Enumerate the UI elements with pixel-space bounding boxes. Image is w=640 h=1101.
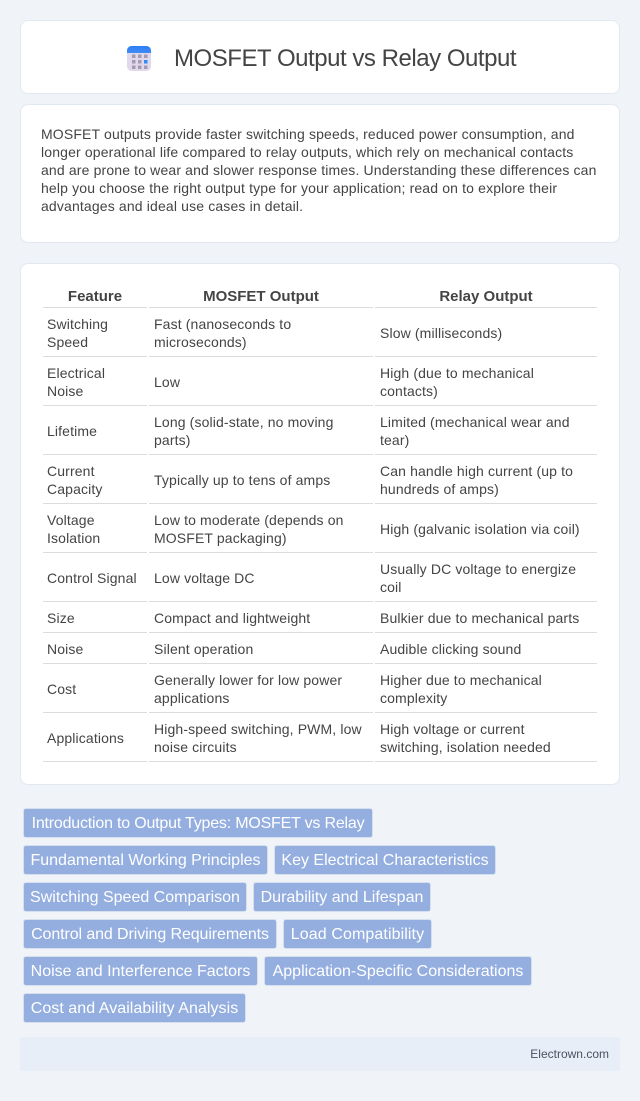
- panel: comparison table: MOSFET packaging): [154, 530, 287, 546]
- topic tags: Durability and Lifespan: [261, 889, 423, 906]
- table header: Feature: [68, 288, 122, 305]
- panel: comparison table: Low to moderate (depends on: [154, 512, 344, 528]
- panel: comparison table: Low voltage DC: [154, 570, 255, 586]
- panel: comparison table: MOSFET Output: [203, 288, 319, 305]
- intro text: MOSFET outputs provide faster switching speeds, reduced power consumption, and: [41, 126, 575, 142]
- panel: comparison table: microseconds): [154, 334, 247, 350]
- row: electrical noise: Electrical: [47, 365, 105, 381]
- row: electrical noise: [47, 365, 105, 399]
- panel: comparison table: applications: [154, 690, 230, 706]
- topic tags: Noise and Interference Factors: [31, 963, 250, 980]
- row: noise: Noise: [47, 641, 83, 657]
- row: current capacity: [47, 463, 103, 497]
- panel: comparison table: Usually DC voltage to energize: [380, 561, 576, 577]
- row: switching speed: Speed: [47, 334, 88, 350]
- row: electrical noise: Noise: [47, 383, 83, 399]
- row: cost: Cost: [47, 681, 76, 697]
- row: voltage isolation: Isolation: [47, 530, 100, 546]
- intro text: and are prone to wear and slower response times. Understanding these differences can: [41, 162, 597, 178]
- row: current capacity: Capacity: [47, 481, 103, 497]
- panel: comparison table: switching, isolation needed: [380, 739, 551, 755]
- footer credit: Electrown.com: [530, 1047, 609, 1061]
- panel: comparison table: [20, 263, 620, 785]
- panel: comparison table: Fast (nanoseconds to: [154, 316, 291, 332]
- topic tags: Application-Specific Considerations: [273, 963, 523, 980]
- panel: comparison table: Slow (milliseconds): [380, 325, 502, 341]
- row: current capacity: Current: [47, 463, 95, 479]
- topic tags: Switching Speed Comparison: [30, 889, 240, 906]
- title: MOSFET Output vs Relay Output: [174, 45, 516, 72]
- panel: comparison table: High (due to mechanical: [380, 365, 534, 381]
- row: size: Size: [47, 610, 75, 626]
- panel: comparison table: hundreds of amps): [380, 481, 499, 497]
- panel: comparison table: Audible clicking sound: [380, 641, 521, 657]
- row: switching speed: [47, 316, 108, 350]
- panel: comparison table: tear): [380, 432, 409, 448]
- panel: comparison table: Silent operation: [154, 641, 253, 657]
- intro text: longer operational life compared to relay outputs, which rely on mechanical contacts: [41, 144, 573, 160]
- panel: comparison table: High-speed switching, PWM, low: [154, 721, 362, 737]
- row: voltage isolation: Voltage: [47, 512, 95, 528]
- intro text: [41, 126, 597, 214]
- panel: comparison table: Typically up to tens of amps: [154, 472, 330, 488]
- row: switching speed: Switching: [47, 316, 108, 332]
- intro panel: [20, 104, 620, 243]
- footer: [20, 1037, 620, 1071]
- icon: calendar: [127, 46, 151, 71]
- topic tags: Control and Driving Requirements: [31, 926, 269, 943]
- row: lifetime: Lifetime: [47, 423, 97, 439]
- panel: comparison table: High (galvanic isolation via coil): [380, 521, 580, 537]
- panel: comparison table: Long (solid-state, no moving: [154, 414, 334, 430]
- topic tags: Key Electrical Characteristics: [281, 852, 489, 869]
- panel: comparison table: Bulkier due to mechanical parts: [380, 610, 579, 626]
- topic tags: Introduction to Output Types: MOSFET vs Relay: [32, 815, 364, 832]
- panel: comparison table: Can handle high current (up to: [380, 463, 573, 479]
- panel: comparison table: Relay Output: [439, 288, 533, 305]
- panel: comparison table: parts): [154, 432, 191, 448]
- panel: comparison table: Low: [154, 374, 180, 390]
- panel: comparison table: Generally lower for low power: [154, 672, 342, 688]
- panel: comparison table: Higher due to mechanical: [380, 672, 542, 688]
- panel: comparison table: coil: [380, 579, 402, 595]
- row: applications: Applications: [47, 730, 124, 746]
- row: control signal: Control Signal: [47, 570, 137, 586]
- topic tags: Load Compatibility: [291, 926, 424, 943]
- topic tags: [23, 808, 532, 1023]
- intro text: help you choose the right output type for your application; read on to explore their: [41, 180, 557, 196]
- panel: comparison table: complexity: [380, 690, 447, 706]
- panel: comparison table: High voltage or current: [380, 721, 525, 737]
- panel: comparison table: Limited (mechanical wear and: [380, 414, 570, 430]
- panel: comparison table: noise circuits: [154, 739, 237, 755]
- topic tags: Cost and Availability Analysis: [31, 1000, 238, 1017]
- panel: comparison table: Compact and lightweight: [154, 610, 310, 626]
- topic tags: Fundamental Working Principles: [30, 852, 261, 869]
- row: voltage isolation: [47, 512, 100, 546]
- intro text: advantages and ideal use cases in detail.: [41, 198, 303, 214]
- header card: [20, 20, 620, 94]
- panel: comparison table: contacts): [380, 383, 438, 399]
